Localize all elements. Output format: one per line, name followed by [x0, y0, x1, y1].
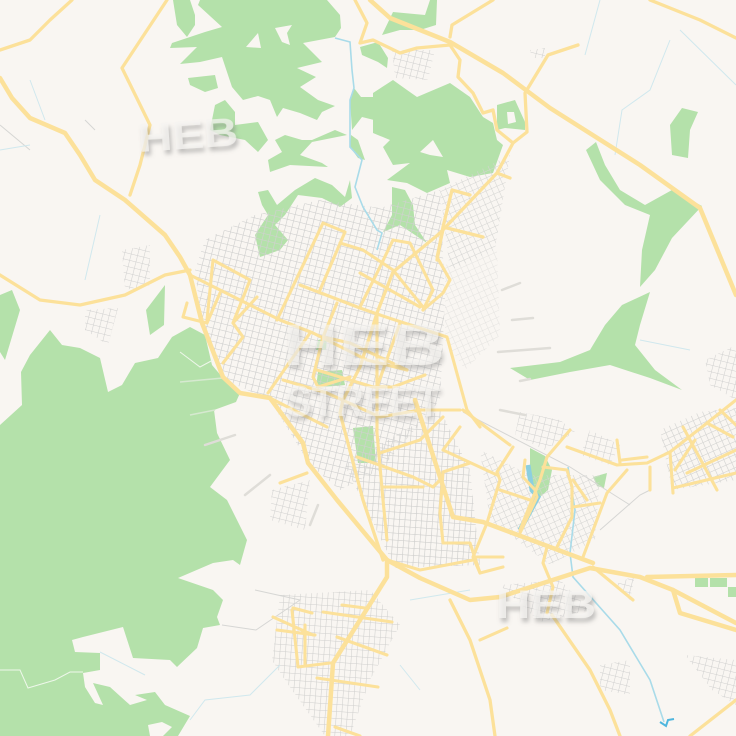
parks — [316, 338, 736, 597]
thin gray roads — [0, 120, 650, 630]
grid: south suburb — [272, 590, 400, 736]
grid: east suburb — [660, 408, 736, 490]
forest: north — [170, 0, 341, 120]
forest: north east strip — [586, 108, 702, 287]
grid: south centre — [345, 410, 480, 568]
grid: central city — [195, 190, 445, 490]
city avenues — [183, 223, 736, 736]
forest: north east of river — [373, 80, 503, 193]
watermark: HEB south east: HEB — [496, 583, 596, 627]
forest: river strips — [350, 88, 427, 243]
watermark shadow streaks — [205, 283, 550, 525]
white streams in forest — [0, 352, 223, 702]
forest: small patches — [360, 0, 525, 130]
icon: water marker — [660, 719, 674, 726]
grid: north east city — [440, 155, 510, 270]
grid: south east — [480, 450, 600, 565]
forest clearings — [148, 25, 516, 736]
watermark: HEB north west: HEB — [137, 110, 239, 161]
watermark: STREET centre: STREET — [285, 377, 440, 426]
lake — [520, 465, 538, 530]
watermark: HEB centre: HEB — [283, 313, 445, 378]
forest: large west — [0, 327, 247, 736]
forest: north small patches — [173, 0, 347, 172]
grid: small neighbourhoods — [85, 48, 736, 705]
forest: north ring — [255, 178, 352, 257]
forest: east — [510, 292, 682, 390]
